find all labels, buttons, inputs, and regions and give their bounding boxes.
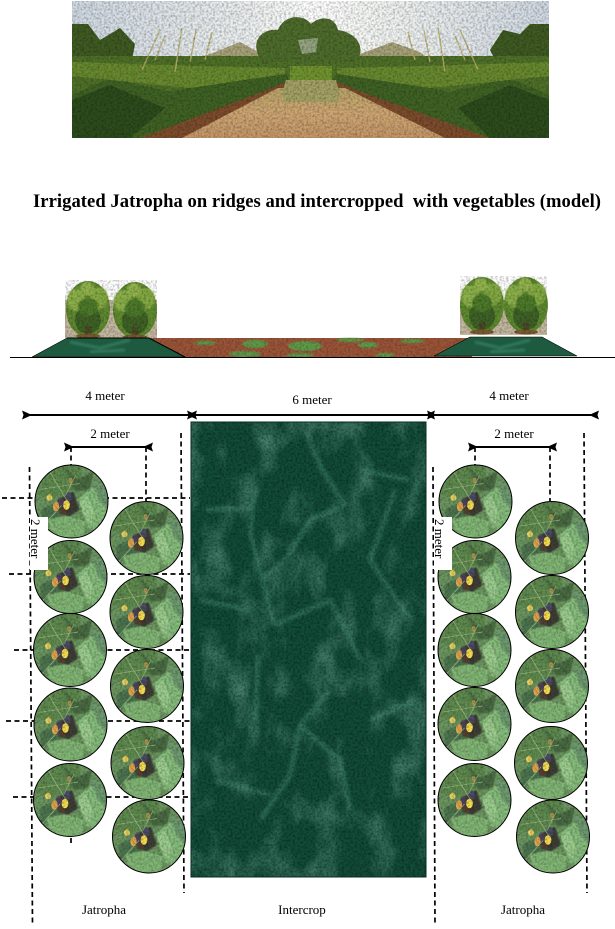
left 2 meter vertical label — [28, 517, 48, 570]
soil strip with vegetables — [150, 338, 472, 357]
dimension arrow: left 4 meter: 4 meter — [85, 388, 125, 403]
left jatropha rows — [33, 464, 186, 874]
right jatropha rows — [438, 464, 590, 874]
right dashed guide lines — [433, 433, 587, 925]
photo: jatropha field with path — [72, 1, 549, 138]
dimension arrow: centre 6 meter: 6 meter — [292, 392, 332, 407]
left ridge — [32, 338, 185, 357]
label: Jatropha left: Jatropha — [82, 902, 126, 917]
right 2 meter vertical label: 2 meter — [432, 519, 447, 559]
dimension arrow: left 2 meter: 2 meter — [90, 426, 130, 441]
right 2 meter vertical label — [432, 517, 452, 570]
dimension arrow: right 4 meter: 4 meter — [489, 388, 529, 403]
label: Jatropha right: Jatropha — [501, 902, 545, 917]
dimension arrow: right 2 meter — [476, 426, 549, 447]
jatropha trees right — [460, 276, 548, 335]
title: Irrigated Jatropha on ridges and intercropped with vegetables (model) — [33, 191, 601, 212]
jatropha trees left — [65, 280, 157, 340]
dimension arrow: right 2 meter: 2 meter — [494, 426, 534, 441]
label: Intercrop: Intercrop — [278, 902, 326, 917]
ground line — [10, 356, 615, 358]
intercrop block — [191, 422, 426, 877]
left 2 meter vertical label: 2 meter — [28, 519, 43, 559]
dimension arrow: left 2 meter — [72, 426, 145, 447]
cross-section diagram of ridges — [10, 276, 615, 358]
left dashed guide lines — [2, 433, 190, 925]
right ridge — [434, 337, 577, 356]
